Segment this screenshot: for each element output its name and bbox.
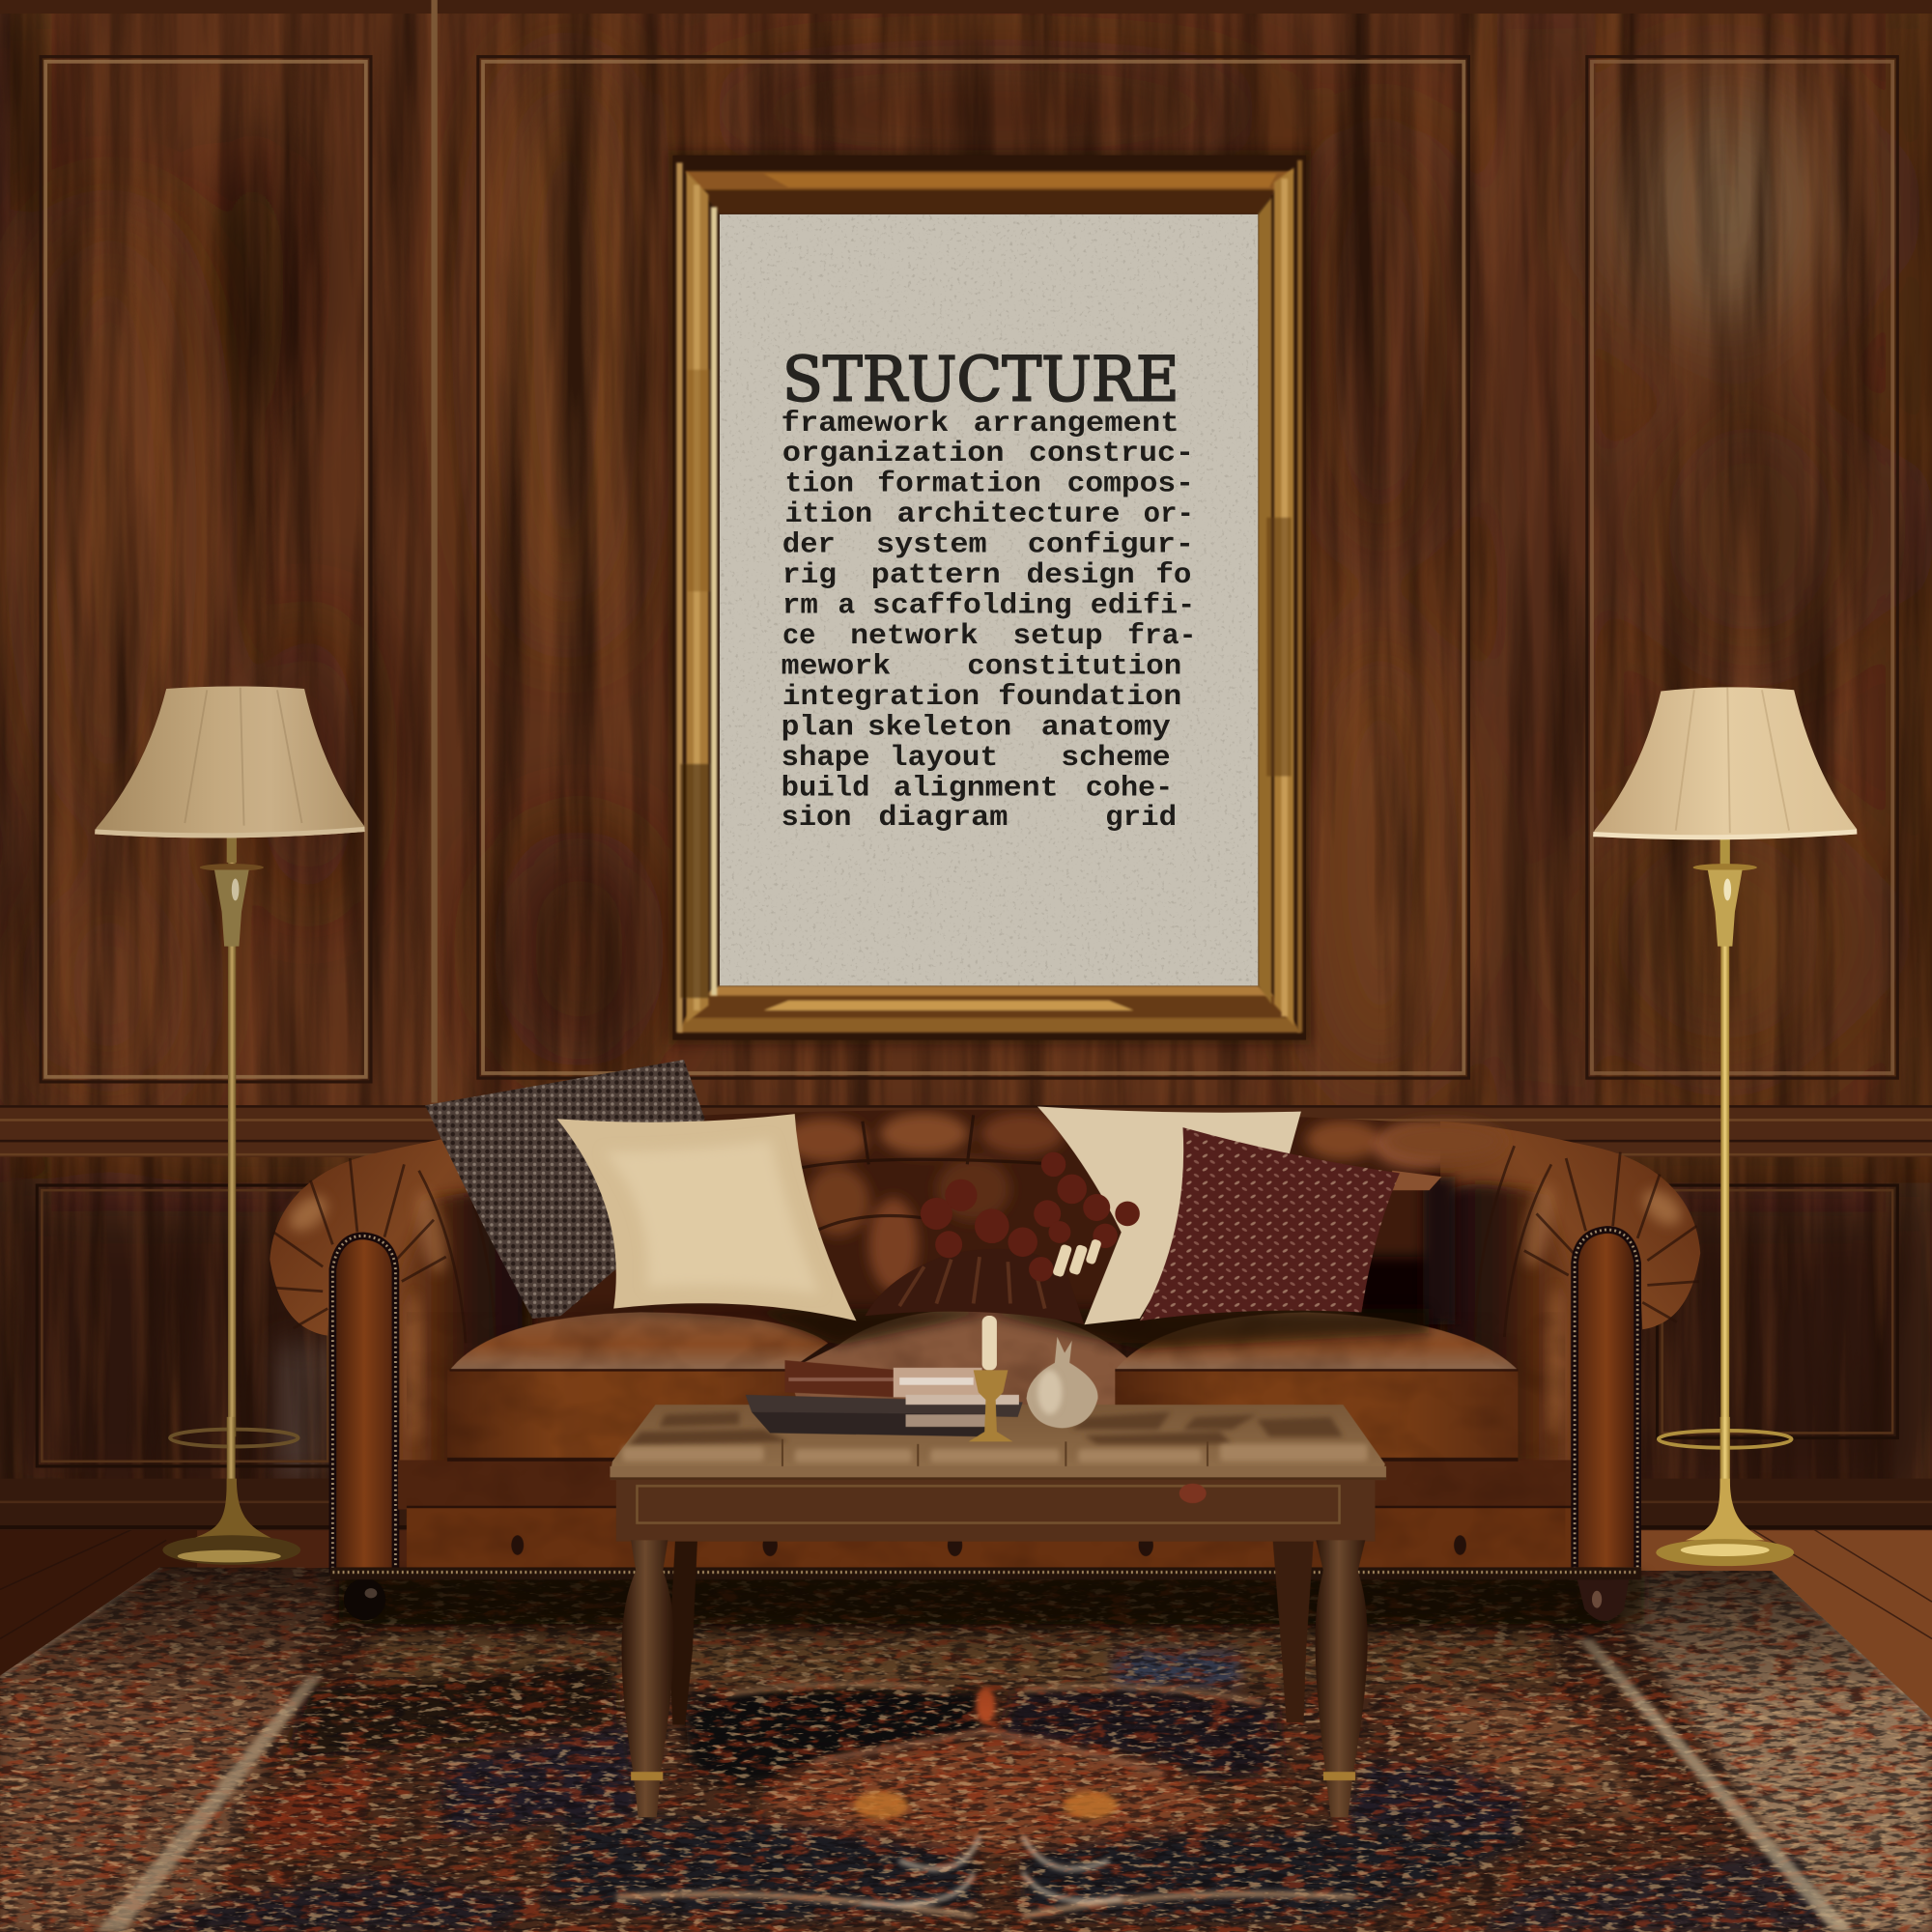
pillow: dark woven [425, 1060, 705, 1319]
frame left [676, 162, 717, 1033]
pillow: maroon paisley [1140, 1127, 1441, 1321]
poster word block: ce [782, 619, 815, 652]
dark leaves [865, 1249, 1084, 1324]
poster word block: ition [784, 497, 872, 530]
poster word block: tion [784, 468, 854, 500]
red berry clusters [921, 1152, 1140, 1282]
poster paper [720, 214, 1258, 985]
poster word block: plan [781, 710, 854, 743]
nailhead trim [330, 1567, 1641, 1579]
panel: lower left [37, 1185, 332, 1466]
pillow: cream right [1037, 1106, 1301, 1324]
leather mottling [407, 1312, 1565, 1571]
apron [616, 1480, 1375, 1542]
shadow below pillows [518, 1309, 1430, 1350]
lamp stand [162, 833, 300, 1565]
wall light and shadow patches [0, 0, 1932, 1540]
poster word block: formation [877, 468, 1041, 500]
floor [0, 1528, 1932, 1932]
poster word block: or- [1144, 497, 1194, 530]
seat cushions [447, 1309, 1518, 1462]
poster word block: pattern [871, 558, 1001, 591]
poster word block: rig [782, 558, 837, 591]
poster word block: fo [1155, 558, 1191, 591]
front legs [621, 1540, 1368, 1817]
floor rug [0, 1565, 1932, 1932]
poster word block: setup [1012, 619, 1103, 652]
coffee table [610, 1405, 1386, 1817]
ceramic vase [1026, 1337, 1098, 1428]
poster [720, 214, 1258, 985]
frame top [685, 171, 1293, 214]
wall moulding panels [37, 57, 1897, 1466]
poster word block: construc- [1029, 437, 1194, 469]
pillow: cream left [557, 1114, 856, 1321]
left cushion [447, 1312, 828, 1460]
poster word block: scheme [1061, 741, 1171, 774]
poster word block [781, 407, 1197, 834]
chair rail [0, 1105, 1932, 1157]
poster word block: grid [1105, 801, 1177, 834]
poster word block: anatomy [1041, 710, 1171, 743]
stack of books [746, 1360, 1023, 1436]
poster word block: foundation [998, 680, 1181, 713]
dried floral bouquet [865, 1152, 1140, 1324]
poster word block: arrangement [974, 407, 1179, 440]
lower base [398, 1460, 1571, 1571]
vertical wall pipe [431, 0, 438, 1103]
frame shadow [668, 151, 1311, 1045]
central dark cartouche [684, 1686, 985, 1786]
poster word block: edifi- [1091, 589, 1195, 622]
poster word block: framework [781, 407, 949, 440]
poster word block: der [782, 528, 836, 561]
poster word block: alignment [894, 771, 1059, 804]
poster word block: system [876, 528, 987, 561]
panel: lower right [1658, 1185, 1897, 1438]
rug outlines [0, 1567, 1932, 1932]
poster word block: layout [890, 741, 998, 774]
poster word block: organization [782, 437, 1005, 469]
left arm [270, 1127, 532, 1574]
gold picture frame [668, 151, 1311, 1045]
grey wall glow beside left arm [277, 1343, 332, 1479]
poster word block: architecture [897, 497, 1120, 530]
frame bottom [678, 985, 1301, 1033]
poster word block: configur- [1028, 528, 1194, 561]
right cushion [1115, 1312, 1518, 1460]
poster word block: compos- [1067, 468, 1194, 500]
lamp shade [95, 686, 365, 838]
poster word block: scaffolding [872, 589, 1072, 622]
poster word block: shape [781, 741, 870, 774]
lamp shade [1593, 687, 1857, 839]
back legs [669, 1540, 1314, 1725]
poster word block: integration [782, 680, 980, 713]
poster word block: fra- [1127, 619, 1197, 652]
poster word block: design [1026, 558, 1135, 591]
right floor lamp [1593, 687, 1857, 1566]
skirting board [0, 1479, 1932, 1530]
frame right [1258, 160, 1302, 1033]
left floor lamp [95, 686, 365, 1565]
poster word block: diagram [878, 801, 1008, 834]
pale petals [1052, 1238, 1102, 1278]
wood grain [0, 0, 1932, 1528]
panel: upper right [1587, 57, 1897, 1078]
tufted back [505, 1103, 1503, 1350]
rug top shading [0, 1565, 1932, 1932]
lower dark lobes [542, 1817, 980, 1922]
tan upper band [370, 1634, 1552, 1683]
poster word block: cohe- [1086, 771, 1173, 804]
cornice [0, 0, 1932, 14]
rug base colours [0, 1565, 1932, 1932]
poster word block: network [850, 619, 979, 652]
rug woven texture [0, 1565, 1932, 1932]
poster title: STRUCTURE [782, 345, 1179, 416]
lamp stand [1656, 836, 1794, 1566]
frame base [672, 156, 1306, 1040]
right shoulder blend [1385, 1122, 1503, 1324]
chesterfield sofa [270, 1103, 1700, 1624]
orange medallion [769, 1740, 1219, 1855]
panel: upper centre [478, 57, 1468, 1078]
poster word block: a [838, 589, 855, 622]
poster word block: constitution [967, 650, 1181, 683]
poster word block: build [781, 771, 870, 804]
centre cushion [788, 1309, 1140, 1417]
under-sofa shadow [332, 1575, 1614, 1629]
poster word block: mework [781, 650, 891, 683]
candle and brass holder [969, 1316, 1012, 1441]
poster word block: sion [781, 801, 851, 834]
sofa feet [344, 1578, 1629, 1621]
panel: upper left [41, 57, 371, 1082]
sofa floor shadow [339, 1575, 1645, 1624]
poster word block: skeleton [867, 710, 1011, 743]
outer borders [0, 1567, 345, 1932]
poster word block: rm [782, 589, 818, 622]
tufted top [610, 1405, 1386, 1480]
right arm [1438, 1122, 1700, 1567]
